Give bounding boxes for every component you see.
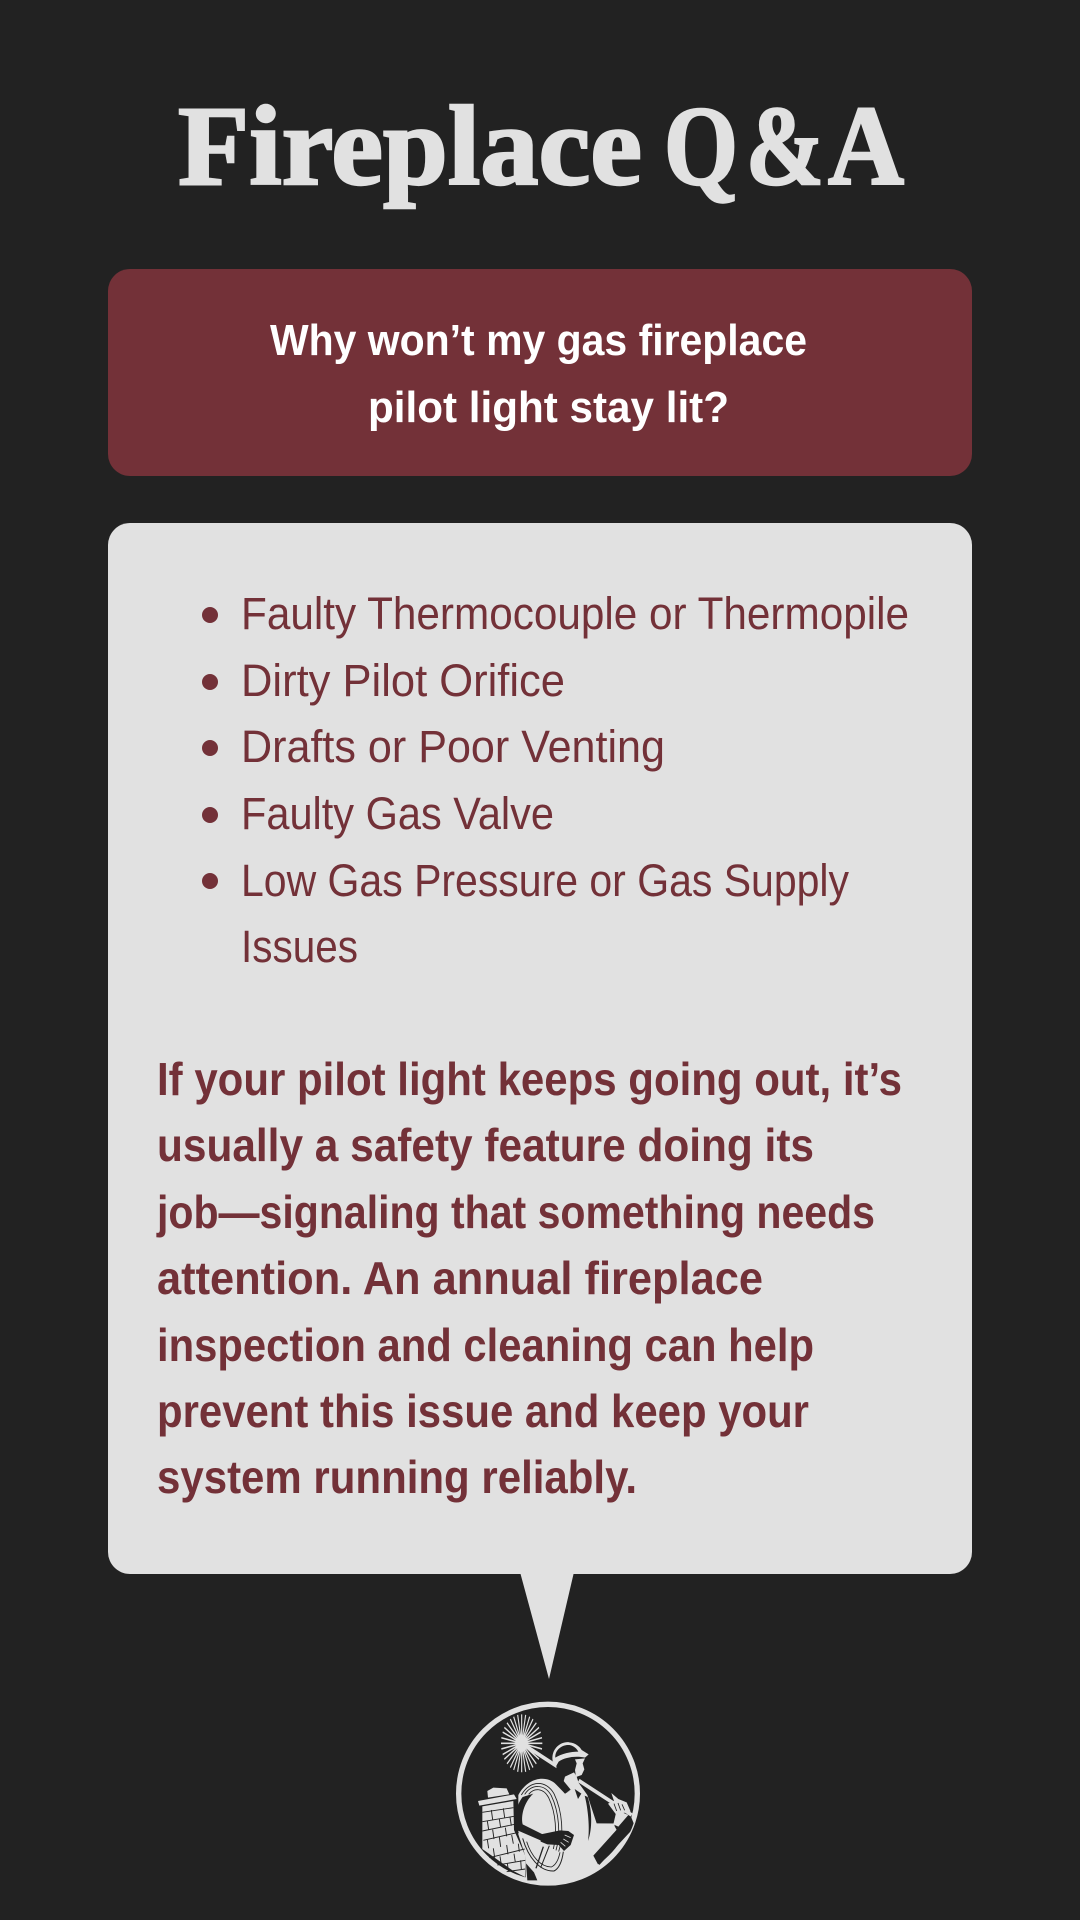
bullet list of causes: Faulty Gas Valve — [241, 788, 554, 839]
lower rope — [523, 1838, 563, 1871]
pole — [522, 1743, 632, 1815]
title: Q — [664, 84, 738, 209]
head shadow — [556, 1764, 580, 1794]
panel: answer speech bubble — [108, 523, 972, 1679]
collar and strap — [563, 1781, 571, 1794]
explanatory paragraph: inspection and cleaning can help — [157, 1319, 814, 1371]
hand on pole — [608, 1793, 631, 1814]
chimney — [478, 1788, 525, 1877]
gloved hand — [541, 1830, 574, 1851]
explanatory paragraph: usually a safety feature doing its — [157, 1119, 814, 1171]
dark wedge under pole — [600, 1823, 614, 1824]
explanatory paragraph: job—signaling that something needs — [156, 1186, 875, 1238]
explanatory paragraph: prevent this issue and keep your — [157, 1385, 809, 1437]
dark wedge lower right — [598, 1817, 634, 1865]
bullet list of causes: Faulty Thermocouple or Thermopile — [241, 588, 909, 639]
explanatory paragraph: attention. An annual fireplace — [157, 1252, 763, 1304]
bullet list of causes: Low Gas Pressure or Gas Supply — [241, 855, 849, 906]
neck and face — [563, 1772, 579, 1792]
brush — [501, 1714, 542, 1772]
bullet list of causes: Drafts or Poor Venting — [241, 721, 665, 772]
panel: question — [108, 269, 972, 476]
body — [518, 1778, 616, 1880]
explanatory paragraph: system running reliably. — [157, 1451, 637, 1503]
title: & — [746, 84, 824, 209]
bullet list of causes: Dirty Pilot Orifice — [241, 655, 565, 706]
dark crescent around coil — [518, 1794, 542, 1840]
bullet list of causes — [202, 588, 909, 972]
explanatory paragraph — [156, 1053, 902, 1503]
icon: chimney sweep logo — [459, 1704, 640, 1895]
question text: Why won’t my gas fireplace — [270, 316, 807, 365]
explanatory paragraph: If your pilot light keeps going out, it’s — [157, 1053, 902, 1105]
question text: pilot light stay lit? — [368, 383, 729, 432]
bullet list of causes: Issues — [241, 921, 358, 972]
title: A — [828, 84, 904, 209]
rope coil lines — [521, 1783, 562, 1852]
question text — [270, 316, 807, 432]
hat — [552, 1742, 589, 1766]
title — [178, 84, 904, 209]
title: Fireplace — [178, 84, 642, 209]
